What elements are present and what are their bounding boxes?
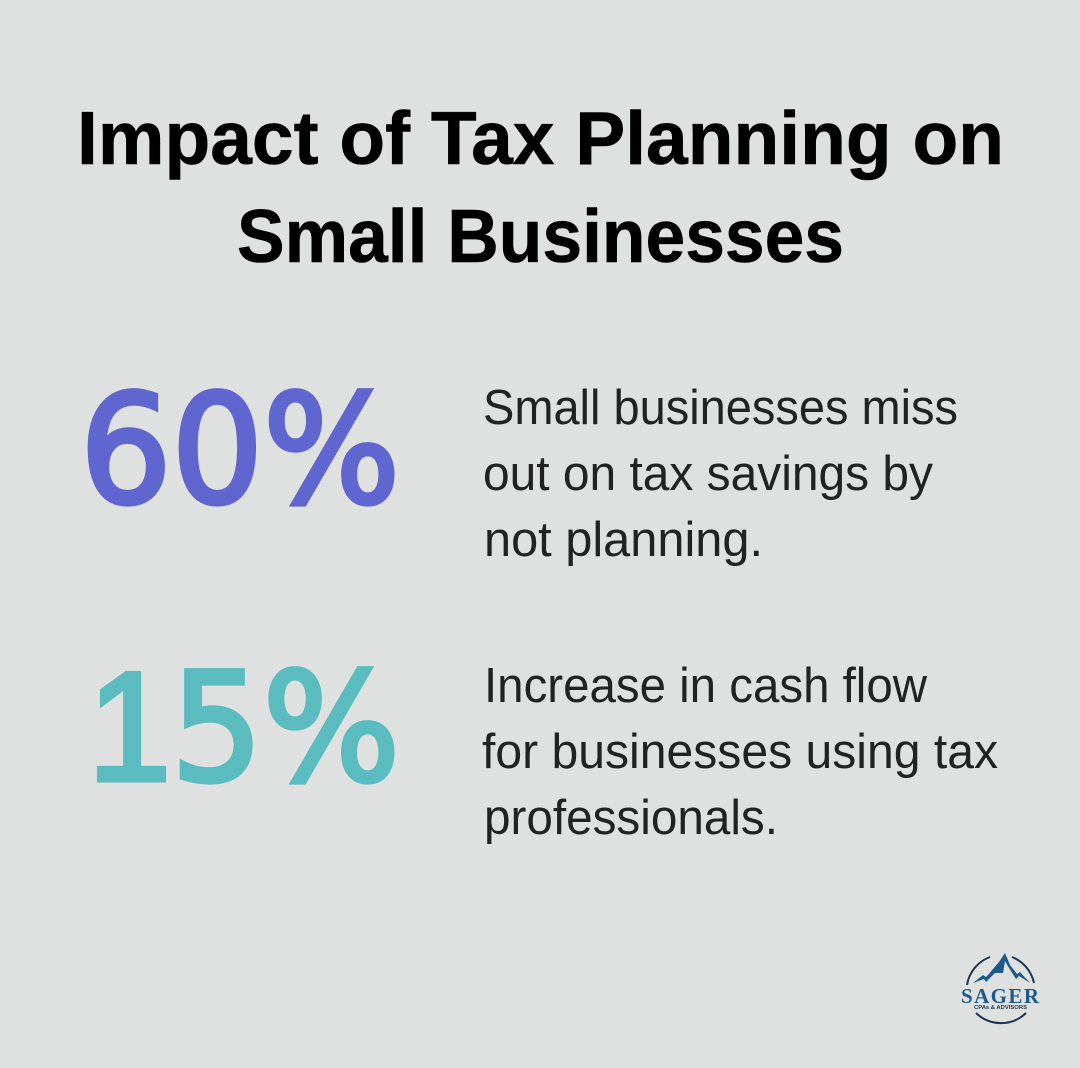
stat description: cash flow: for businesses using tax bbox=[482, 725, 998, 779]
title: Impact of Tax Planning on bbox=[77, 96, 1004, 180]
stat description: cash flow: Increase in cash flow bbox=[484, 659, 928, 713]
logo tagline: CPAs & ADVISORS bbox=[974, 1005, 1028, 1011]
stat description: cash flow bbox=[482, 659, 998, 845]
icon: mountains bbox=[973, 953, 1030, 983]
logo wordmark: SAGER bbox=[961, 984, 1040, 1008]
logo ring arcs bbox=[967, 957, 1034, 1023]
stat number: 60%: 60% bbox=[80, 364, 400, 538]
logo: Sager CPAs & Advisors bbox=[961, 953, 1040, 1023]
stat description: cash flow: professionals. bbox=[484, 791, 778, 845]
stat: 15% bbox=[88, 640, 998, 845]
stat description: missed savings: out on tax savings by bbox=[483, 447, 933, 501]
stat description: missed savings: not planning. bbox=[484, 513, 763, 567]
title bbox=[77, 96, 1004, 278]
stat description: missed savings: Small businesses miss bbox=[483, 381, 958, 435]
stat description: missed savings bbox=[483, 381, 958, 567]
title: Small Businesses bbox=[237, 194, 844, 278]
stat: 60% bbox=[80, 364, 958, 567]
stat number: 15%: 15% bbox=[88, 640, 400, 816]
